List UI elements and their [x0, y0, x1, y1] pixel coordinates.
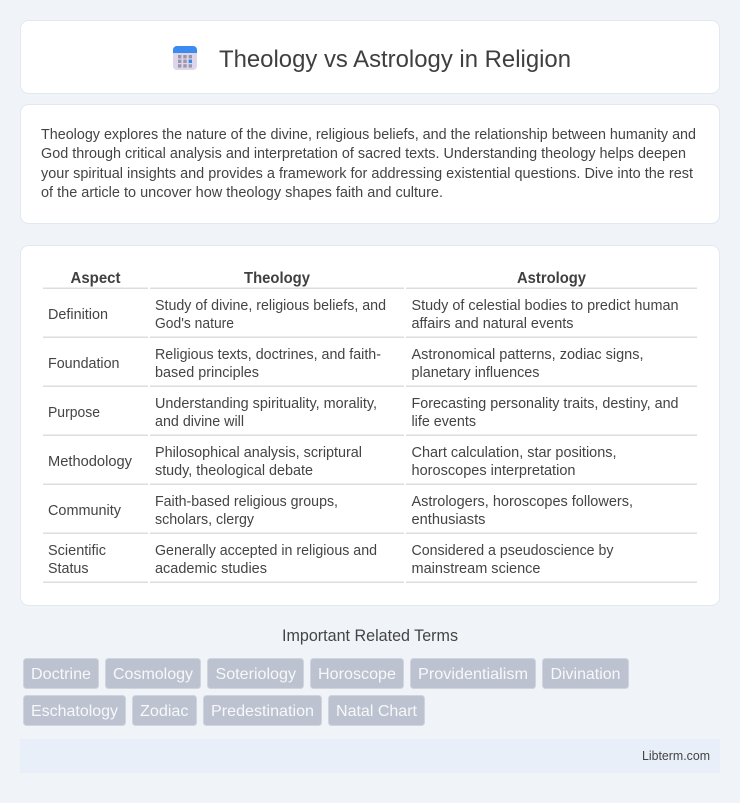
row: purpose: [48, 396, 678, 430]
intro text: of the article to uncover how theology shapes faith and culture.: [41, 185, 443, 201]
table header: [70, 270, 586, 287]
row: foundation: Astronomical patterns, zodiac signs,: [412, 347, 644, 363]
table header: Theology: [244, 270, 310, 287]
related terms chips: [24, 658, 628, 726]
header panel: [20, 20, 720, 94]
row: purpose: life events: [412, 414, 476, 430]
row: foundation: [48, 347, 644, 381]
row: scientific status: Generally accepted in religious and: [155, 543, 377, 559]
intro text: your spiritual insights and provides a framework for addressing existential questions. Dive into the rest: [41, 166, 693, 182]
row: methodology: Philosophical analysis, scriptural: [155, 445, 362, 461]
row: foundation: Religious texts, doctrines, and faith-: [155, 347, 381, 363]
row: methodology: Chart calculation, star positions,: [412, 445, 616, 461]
title: Theology vs Astrology in Religion: [219, 46, 571, 73]
row: methodology: study, theological debate: [155, 463, 313, 479]
row: foundation: planetary influences: [412, 365, 540, 381]
row: scientific status: Scientific: [48, 543, 106, 559]
row: scientific status: Status: [48, 561, 88, 577]
related terms chips: Soteriology: [216, 666, 296, 683]
row: scientific status: academic studies: [155, 561, 267, 577]
related terms chips: Eschatology: [31, 703, 118, 720]
table header: Astrology: [517, 270, 586, 287]
related terms chips: Predestination: [211, 703, 314, 720]
row: scientific status: [48, 543, 614, 577]
intro text: God through critical analysis and interpretation of sacred texts. Understanding theology helps deepen: [41, 146, 686, 162]
row: definition: affairs and natural events: [412, 316, 574, 332]
related terms chips: Divination: [550, 666, 620, 683]
row: methodology: Methodology: [48, 454, 133, 470]
row: purpose: Forecasting personality traits, destiny, and: [412, 396, 678, 412]
row: definition: [48, 298, 678, 332]
row: definition: Study of divine, religious beliefs, and: [155, 298, 386, 314]
row: scientific status: mainstream science: [412, 561, 540, 577]
icon: calendar: [173, 46, 197, 70]
row: foundation: Foundation: [48, 356, 120, 372]
related terms chips: Natal Chart: [336, 703, 418, 720]
row: community: Faith-based religious groups,: [155, 494, 338, 510]
row: community: Astrologers, horoscopes followers,: [412, 494, 633, 510]
table header: Aspect: [70, 270, 121, 287]
table rules: [43, 288, 697, 583]
row: foundation: based principles: [155, 365, 259, 381]
row: definition: God's nature: [155, 316, 234, 332]
row: purpose: and divine will: [155, 414, 244, 430]
row: community: [48, 494, 633, 528]
row: methodology: horoscopes interpretation: [412, 463, 576, 479]
row: purpose: Purpose: [48, 405, 100, 421]
related terms chips: Cosmology: [113, 666, 193, 683]
row: definition: Study of celestial bodies to predict human: [412, 298, 678, 314]
row: scientific status: Considered a pseudoscience by: [412, 543, 614, 559]
related terms heading: Important Related Terms: [282, 627, 458, 645]
related terms chips: Zodiac: [140, 703, 188, 720]
footer credit: Libterm.com: [642, 749, 710, 763]
panel: introduction: [20, 104, 720, 224]
related terms chips: Doctrine: [31, 666, 91, 683]
row: community: Community: [48, 503, 122, 519]
panel: comparison table: [20, 246, 720, 606]
intro text: [41, 127, 696, 201]
footer bar: [20, 739, 720, 773]
intro text: Theology explores the nature of the divine, religious beliefs, and the relationship between humanity and: [41, 127, 696, 143]
row: community: enthusiasts: [412, 512, 486, 528]
row: methodology: [48, 445, 616, 479]
related terms chips: Providentialism: [418, 666, 528, 683]
row: community: scholars, clergy: [155, 512, 255, 528]
related terms chips: Horoscope: [318, 666, 396, 683]
row: purpose: Understanding spirituality, morality,: [155, 396, 377, 412]
row: definition: Definition: [48, 307, 108, 323]
